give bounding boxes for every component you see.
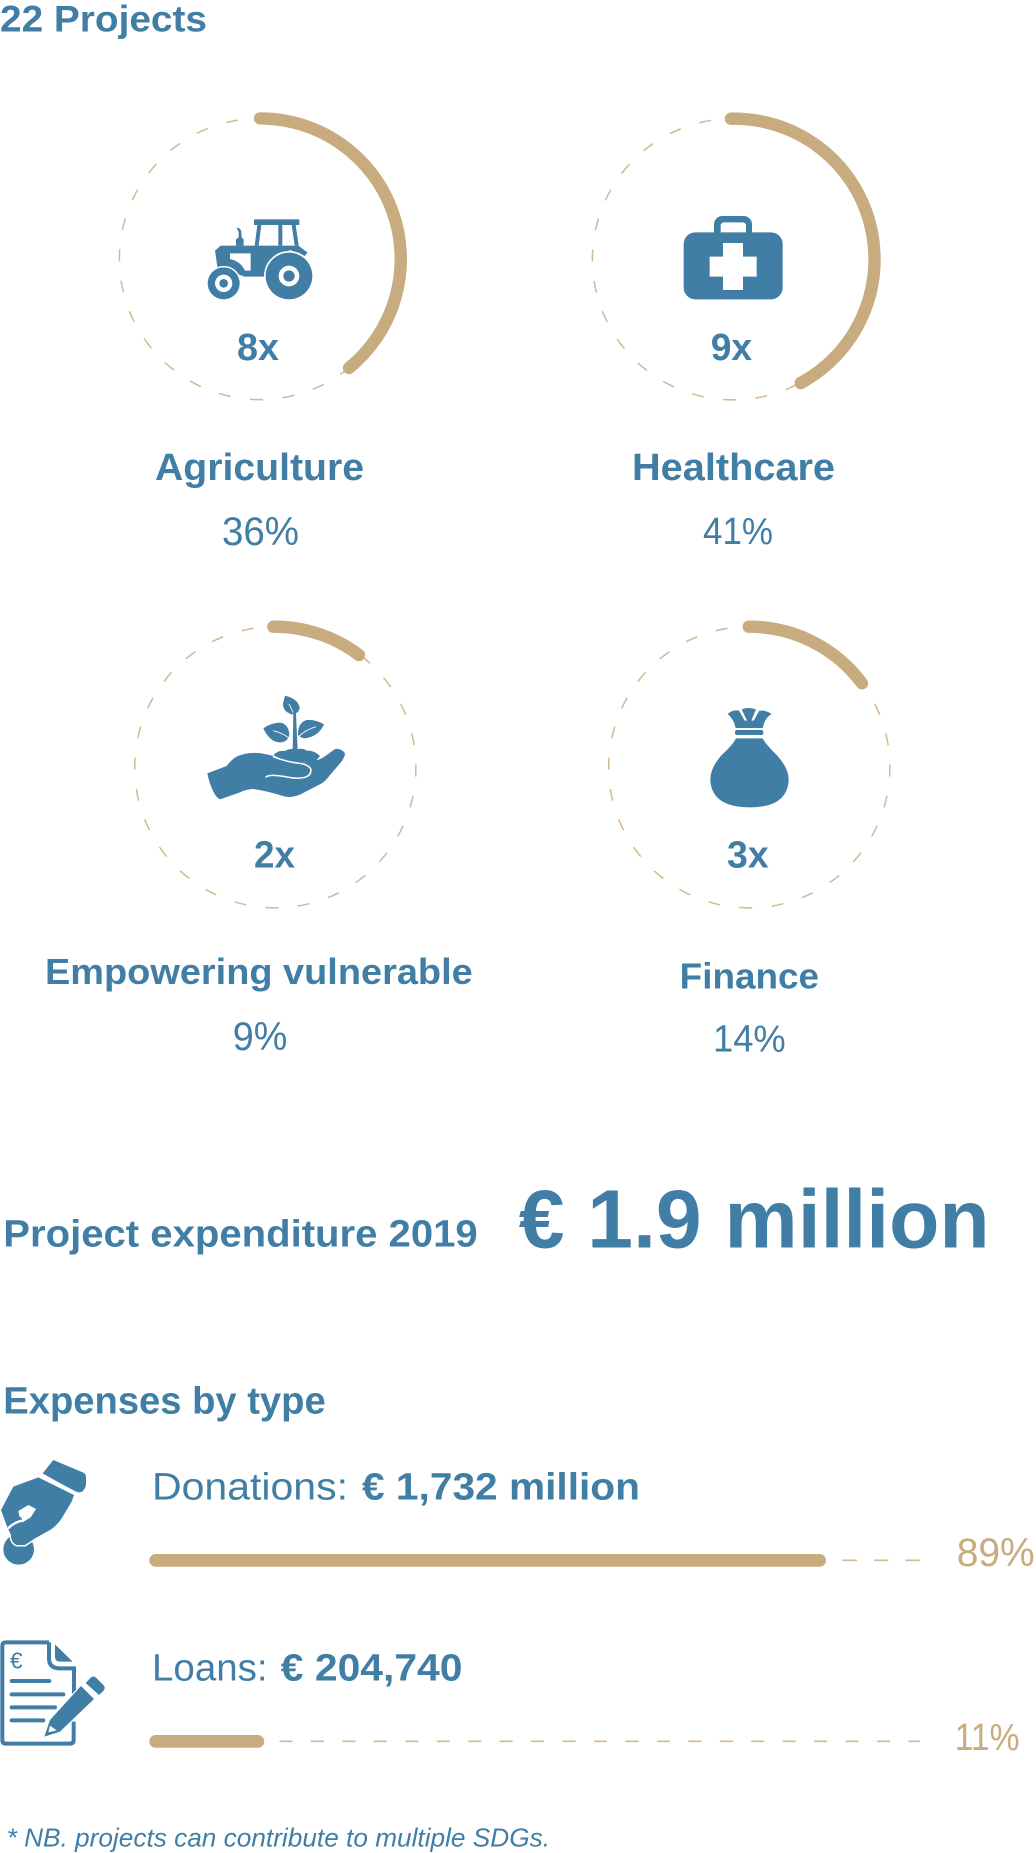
value: donations: € 1,732 million xyxy=(362,1466,640,1508)
count: 3x: 3x xyxy=(727,835,769,877)
bar: loans 11% xyxy=(149,1735,264,1748)
row: loans xyxy=(2,1642,1019,1759)
label: Finance: Finance xyxy=(680,955,819,996)
count: 8x: 8x xyxy=(237,327,279,369)
percent: 36%: 36% xyxy=(222,510,299,554)
panel: finance xyxy=(607,625,892,1060)
progress ring: agriculture xyxy=(117,116,403,402)
row: donations xyxy=(1,1460,1035,1575)
panel: agriculture xyxy=(117,116,403,554)
label: Agriculture: Agriculture xyxy=(155,447,364,489)
percent: 89%: 89% xyxy=(957,1531,1035,1575)
label: Empowering vulnerable: Empowering vulnerable xyxy=(45,951,473,992)
icon: contract with pencil xyxy=(2,1642,105,1744)
heading: project expenditure 2019: Project expenditure 2019 xyxy=(3,1214,478,1256)
icon: money bag xyxy=(710,708,789,807)
footnote: * NB. projects can contribute to multiple SDGs. xyxy=(7,1823,550,1853)
big number: € 1.9 million: € 1.9 million xyxy=(519,1172,990,1265)
bar: donations 89% xyxy=(149,1554,826,1567)
progress ring: finance xyxy=(607,625,892,910)
count: 9x: 9x xyxy=(711,327,752,369)
percent: 14%: 14% xyxy=(713,1018,786,1060)
icon: tractor xyxy=(208,219,312,299)
icon: contract with pencil: € xyxy=(10,1647,23,1673)
icon: medical kit xyxy=(684,216,783,299)
icon: hand dropping coin xyxy=(1,1460,86,1565)
percent: 9%: 9% xyxy=(233,1015,287,1059)
percent: 11%: 11% xyxy=(955,1717,1020,1759)
value: loans: € 204,740 xyxy=(281,1648,462,1690)
heading: expenses by type: Expenses by type xyxy=(3,1380,326,1422)
progress ring: empowering vulnerable xyxy=(133,625,418,910)
panel: healthcare xyxy=(590,117,876,553)
icon: hand with seedling xyxy=(207,696,345,799)
progress ring: healthcare xyxy=(590,117,876,402)
count: 2x: 2x xyxy=(254,835,295,877)
label: loans: Loans: xyxy=(152,1648,268,1690)
percent: 41%: 41% xyxy=(703,511,773,553)
panel: empowering vulnerable xyxy=(45,625,473,1059)
label: Healthcare: Healthcare xyxy=(632,447,835,489)
label: donations: Donations: xyxy=(152,1466,348,1508)
